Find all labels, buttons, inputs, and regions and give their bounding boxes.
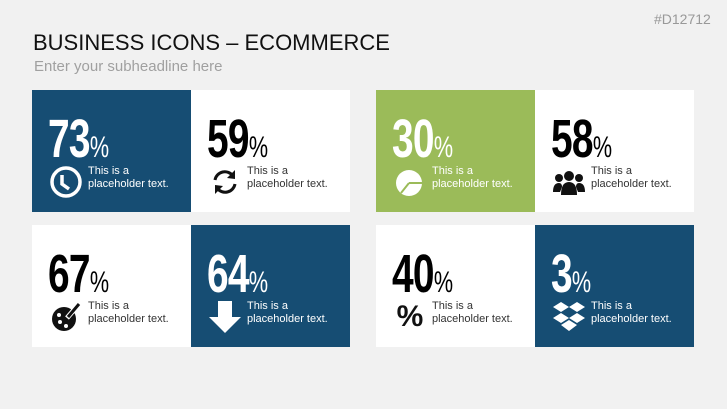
icon: palette [52, 303, 80, 331]
tile: 73% [32, 90, 191, 212]
tile: 3%: placeholder text. [591, 313, 672, 325]
icon: refresh [214, 170, 236, 194]
tile: 30%: 30% [392, 109, 452, 169]
tile: 59%: placeholder text. [247, 178, 328, 190]
icon: dropbox [553, 302, 585, 331]
icon: arrow down [209, 301, 241, 333]
icon: group [553, 171, 585, 195]
tile: 59% [191, 90, 350, 212]
tile: 67%: 67% [48, 244, 108, 304]
tile: 3% [535, 225, 694, 347]
title: BUSINESS ICONS – ECOMMERCE [33, 30, 390, 55]
tile: 67% [32, 225, 191, 347]
tile: 30%: This is a [432, 165, 473, 177]
tile: 58%: This is a [591, 165, 632, 177]
tile: 58%: 58% [551, 109, 611, 169]
tile: 64%: placeholder text. [247, 313, 328, 325]
tag: #D12712 [654, 11, 711, 27]
tile: 58% [535, 90, 694, 212]
icon: clock [50, 166, 82, 198]
tile: 73%: 73% [48, 109, 108, 169]
tile: 58%: placeholder text. [591, 178, 672, 190]
icon: pie chart [396, 170, 422, 196]
subheadline: Enter your subheadline here [34, 58, 222, 75]
tile: 40%: This is a [432, 300, 473, 312]
tile: 67%: This is a [88, 300, 129, 312]
tile: 40%: 40% [392, 244, 452, 304]
tile: 73%: This is a [88, 165, 129, 177]
tile: 67%: placeholder text. [88, 313, 169, 325]
tile: 73%: placeholder text. [88, 178, 169, 190]
tile: 30%: placeholder text. [432, 178, 513, 190]
tile: 3%: 3% [551, 244, 590, 304]
tile: 64%: This is a [247, 300, 288, 312]
tile: 40%: placeholder text. [432, 313, 513, 325]
tile: 3%: This is a [591, 300, 632, 312]
tile: 64% [191, 225, 350, 347]
icon: percent: % [397, 300, 423, 333]
tile: 59%: 59% [207, 109, 267, 169]
tile: 30% [376, 90, 535, 212]
tile: 40% [376, 225, 535, 347]
tile: 59%: This is a [247, 165, 288, 177]
tile: 64%: 64% [207, 244, 267, 304]
